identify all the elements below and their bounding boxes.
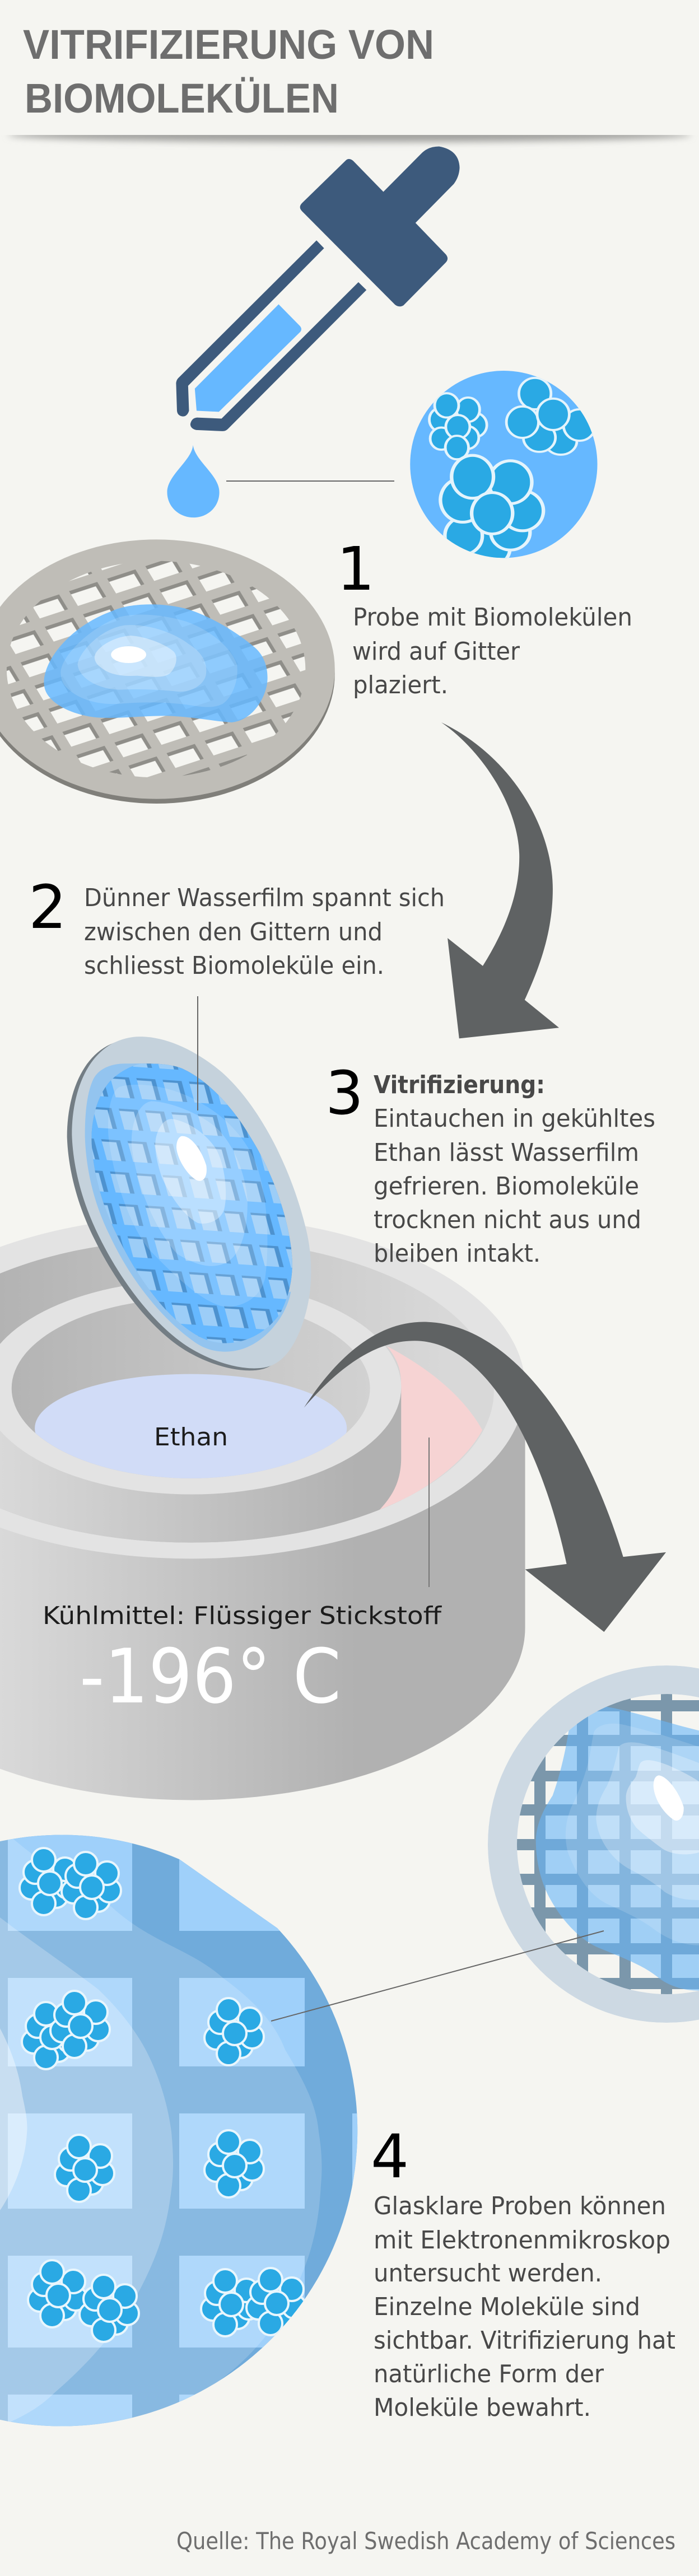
tilted grid [91, 1063, 292, 1343]
step 3 text: bleiben intakt. [374, 1239, 540, 1268]
step 3 text: gefrieren. Biomoleküle [374, 1172, 639, 1201]
film layers [108, 1085, 267, 1307]
ethan vessel rim [0, 1280, 401, 1495]
connector line to molecules [271, 1931, 604, 2021]
step 3 text [374, 1071, 655, 1268]
icon: dropper [176, 146, 460, 431]
film zone middle [0, 1915, 173, 2430]
step 3 text: Ethan lässt Wasserfilm [374, 1138, 639, 1167]
step 3 text: trocknen nicht aus und [374, 1206, 641, 1234]
step 4 text: Glasklare Proben können [374, 2192, 666, 2220]
arrow: dewar to detail [304, 1322, 666, 1632]
title [23, 21, 434, 122]
title: BIOMOLEKÜLEN [25, 75, 339, 122]
header shadow [8, 135, 691, 147]
molecules circle [410, 371, 598, 566]
step 4 text: untersucht werden. [374, 2259, 602, 2288]
small cluster [429, 393, 487, 459]
arrow: step 1 to step 3 [441, 722, 559, 1038]
step 3 number: 3 [325, 1059, 364, 1128]
step 3 text: Vitrifizierung: [374, 1071, 545, 1099]
tilted grid ring [72, 1037, 311, 1368]
step 2 text: zwischen den Gittern und [84, 918, 383, 946]
title: VITRIFIZIERUNG VON [23, 21, 434, 68]
step 1 text [352, 603, 632, 699]
connector line drop to molecules [226, 480, 394, 482]
step 4 text: Einzelne Moleküle sind [374, 2293, 640, 2321]
dropper tube bottom [190, 282, 366, 431]
step 2 number: 2 [29, 873, 67, 942]
step 4 text: mit Elektronenmikroskop [374, 2226, 670, 2255]
coolant well [0, 1247, 494, 1543]
tilted inner edge [91, 1063, 292, 1343]
step 1 text: Probe mit Biomolekülen [353, 603, 632, 632]
tilted film outer rim [85, 1063, 291, 1352]
step 4 text: sichtbar. Vitrifizierung hat [374, 2326, 675, 2355]
step 2 text [84, 884, 445, 980]
detail grid and film [504, 1680, 699, 2016]
step 4 number: 4 [371, 2122, 409, 2192]
molecules row 3 [55, 2130, 264, 2202]
dropper liquid [195, 304, 301, 412]
magnified circle with molecules [0, 1820, 364, 2434]
step 4 text: natürliche Form der [374, 2360, 604, 2388]
label: Ethan: Ethan [154, 1423, 228, 1452]
connector line from step 2 [197, 996, 198, 1110]
film zone inner [0, 2016, 27, 2218]
step 4 text: Moleküle bewahrt. [374, 2393, 591, 2422]
ethan surface [35, 1374, 347, 1483]
molecules row 1 [20, 1848, 121, 1919]
icon: water drop [167, 445, 220, 517]
step 4 text [374, 2192, 675, 2422]
dewar body [0, 1387, 525, 1800]
grid disc [0, 539, 335, 799]
dropper tube left [176, 240, 324, 417]
large cluster [440, 455, 543, 566]
detail ring [488, 1665, 699, 2023]
sample blob [44, 604, 268, 722]
tilted grid edge [67, 1039, 306, 1370]
tilted grid above dewar [67, 1037, 311, 1370]
grid holes [7, 561, 305, 777]
connector line to coolant [428, 1438, 430, 1587]
dewar outer rim [0, 1216, 525, 1558]
step 1 text: wird auf Gitter [352, 637, 520, 666]
magnified base [0, 1831, 364, 2430]
grid with sample drop [0, 539, 335, 804]
magnified grid cells [8, 1820, 364, 2434]
step 1 text: plaziert. [353, 671, 448, 699]
dropper bulb [300, 146, 460, 306]
molecules row 4 [28, 2260, 306, 2342]
step 2 text: schliesst Biomoleküle ein. [84, 951, 384, 980]
step 3 text: Eintauchen in gekühltes [374, 1104, 655, 1133]
step 2 text: Dünner Wasserfilm spannt sich [84, 884, 445, 912]
molecules row 2 [22, 1991, 264, 2069]
label: temperature: -196° C [80, 1633, 341, 1720]
medium cluster [506, 378, 595, 455]
label: coolant: Kühlmittel: Flüssiger Stickstoff [43, 1602, 442, 1630]
step 1 number: 1 [337, 535, 375, 604]
grid disc edge [0, 544, 335, 804]
ethan vessel interior [12, 1298, 370, 1478]
detail circle: frozen grid [488, 1665, 699, 2023]
film zone outer [0, 1831, 321, 2430]
dewar with coolant and ethan [0, 1216, 526, 1800]
